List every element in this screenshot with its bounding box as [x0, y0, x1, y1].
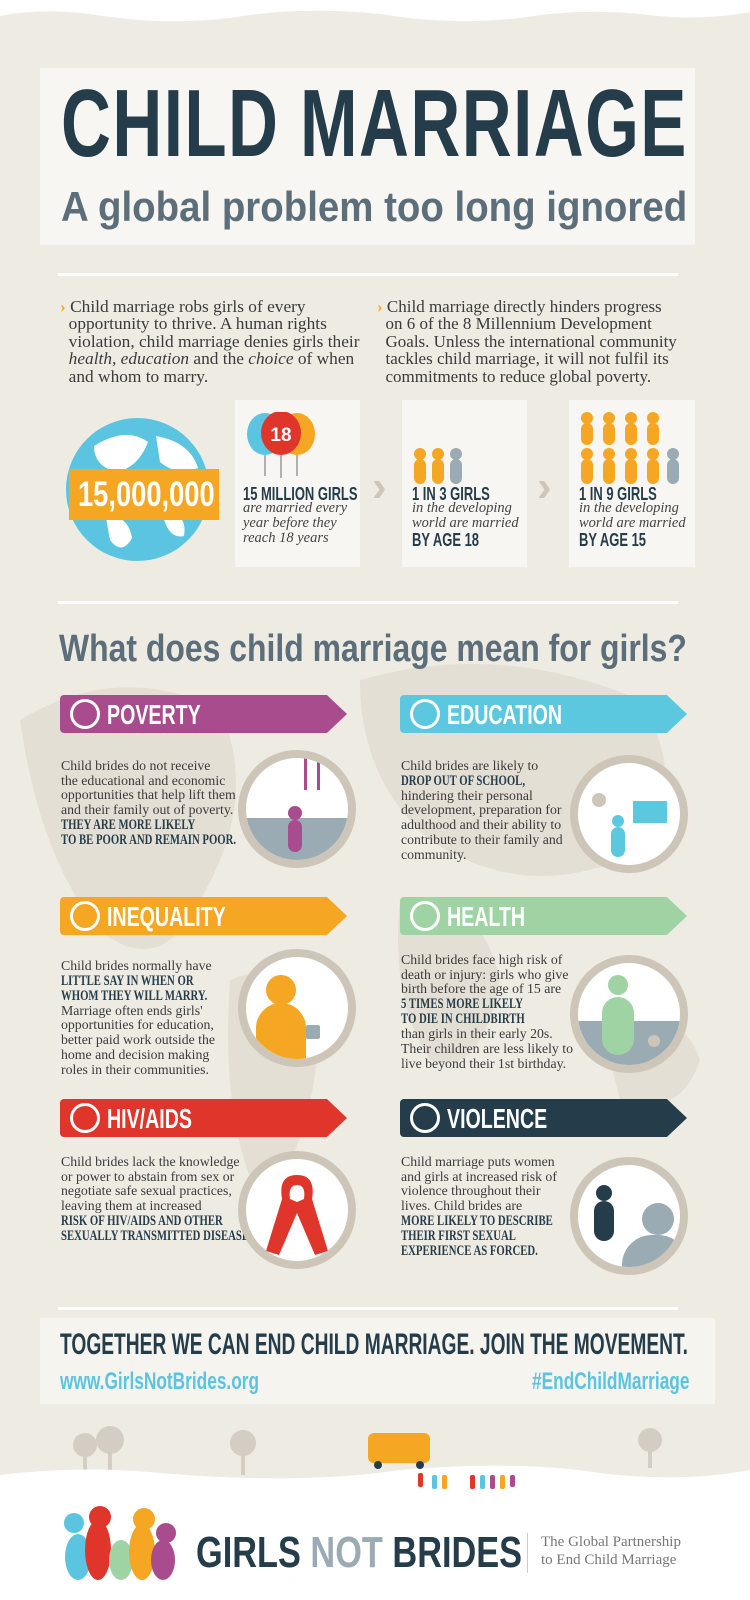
stat box: 15 million girls: reach 18 years [243, 530, 329, 546]
arrow: › [372, 462, 387, 511]
panel: inequality: Child brides normally have Marriage often ends girls' [61, 958, 212, 1018]
banner: education [400, 695, 687, 733]
panel: health [400, 897, 688, 1073]
panel: violence: violence throughout their [401, 1183, 540, 1198]
landscape with trees and bus [0, 1426, 750, 1600]
panel: inequality: WHOM THEY WILL MARRY. [61, 988, 207, 1004]
stat box: 1 in 3 [402, 400, 527, 567]
icon: balloons: 18 [270, 425, 292, 446]
stat box: 1 in 3: in the developing [412, 500, 512, 516]
panel: inequality: better paid work outside the [61, 1032, 215, 1047]
panel: violence: VIOLENCE [447, 1103, 547, 1134]
panel: health: death or injury: girls who give [401, 967, 568, 982]
link: hashtag: #EndChildMarriage [532, 1368, 689, 1395]
panel: health: birth before the age of 15 are than girls in their early 20s. [401, 981, 561, 1041]
stat box: 15 million girls: are married every [243, 500, 347, 516]
text: and their family out of poverty. [61, 802, 233, 817]
stat box: 1 in 9: 1 IN 9 GIRLS [579, 484, 657, 504]
panel: inequality: roles in their communities. [61, 1062, 209, 1077]
panel: health: Child brides face high risk of [401, 952, 562, 967]
globe with 15,000,000 banner [66, 418, 219, 561]
panel: inequality: opportunities for education, [61, 1017, 214, 1032]
panel: hiv/aids: leaving them at increased [61, 1198, 202, 1213]
panel: hiv/aids: Child brides lack the knowledge [61, 1154, 240, 1169]
subtitle: A global problem too long ignored [61, 183, 687, 230]
stat box: 1 in 9: world are married [579, 515, 686, 531]
icon circle: girl and man [570, 1157, 688, 1275]
intro text left: › Child marriage robs girls of every [60, 297, 306, 316]
intro text right [377, 297, 677, 386]
text [61, 758, 236, 848]
intro text right: commitments to reduce global poverty. [386, 367, 651, 386]
panel: inequality: home and decision making [61, 1047, 209, 1062]
panel: health: Their children are less likely to [401, 1041, 573, 1056]
banner: poverty [60, 695, 347, 733]
panel: violence [400, 1099, 688, 1275]
panel: health: HEALTH [447, 901, 525, 932]
panel: violence: lives. Child brides are [401, 1198, 522, 1213]
logo: girls not brides [64, 1506, 681, 1580]
icon circle: pregnant girl [570, 955, 688, 1073]
panel: education: contribute to their family and [401, 832, 563, 847]
panel: education: development, preparation for [401, 802, 562, 817]
intro text right: Goals. Unless the international community [386, 332, 677, 351]
link: website: www.GirlsNotBrides.org [60, 1368, 259, 1395]
stat box: 1 in 9: in the developing [579, 500, 679, 516]
panel: education: DROP OUT OF SCHOOL, [401, 773, 525, 789]
banner: education: EDUCATION [447, 699, 562, 730]
banner: poverty: POVERTY [107, 699, 201, 730]
intro text left [60, 297, 360, 386]
panel: education: Child brides are likely to hindering their personal [401, 758, 538, 803]
panel: education [400, 695, 688, 873]
globe with 15,000,000 banner: 15,000,000 [78, 475, 215, 514]
logo: girls not brides: to End Child Marriage [541, 1552, 676, 1568]
panel: inequality: LITTLE SAY IN WHEN OR [61, 973, 194, 989]
intro text left: violation, child marriage denies girls their [69, 332, 360, 351]
panel: hiv/aids: RISK OF HIV/AIDS AND OTHER [61, 1213, 223, 1229]
call to action box: TOGETHER WE CAN END CHILD MARRIAGE. JOIN THE MOVEMENT. [60, 1328, 688, 1361]
text: TO BE POOR AND REMAIN POOR. [61, 832, 236, 848]
stat box: 1 in 3: 1 IN 3 GIRLS [412, 484, 490, 504]
intro text left: and whom to marry. [69, 367, 208, 386]
icon circle: school [570, 755, 688, 873]
panel: health: live beyond their 1st birthday. [401, 1056, 566, 1071]
panel: education: adulthood and their ability to [401, 817, 561, 832]
icon: girls 1 in 3 [414, 448, 462, 484]
panel: inequality: INEQUALITY [107, 901, 226, 932]
intro text right: tackles child marriage, it will not fulfil its [386, 349, 669, 368]
top torn paper edge [0, 0, 750, 22]
stat box: 15 million girls: year before they [243, 515, 337, 531]
stat box: 15 million girls: 15 MILLION GIRLS [243, 484, 357, 504]
stat box: 1 in 3: BY AGE 18 [412, 530, 479, 550]
panel: education: community. [401, 847, 466, 862]
text: THEY ARE MORE LIKELY [61, 817, 195, 833]
intro text right: › Child marriage directly hinders progress [377, 297, 662, 316]
icon circle: bride with lock [238, 949, 356, 1067]
icon: girls 1 in 9 [581, 412, 679, 484]
panel: health: 5 TIMES MORE LIKELY [401, 996, 523, 1012]
panel: hiv/aids: or power to abstain from sex or [61, 1169, 234, 1184]
icon circle: red ribbon [238, 1151, 356, 1269]
title box [40, 68, 695, 245]
panel: violence: and girls at increased risk of [401, 1169, 557, 1184]
panel: hiv/aids: negotiate safe sexual practices, [61, 1183, 232, 1198]
panel: inequality [60, 897, 356, 1077]
panel: violence: Child marriage puts women [401, 1154, 555, 1169]
panel: violence: MORE LIKELY TO DESCRIBE [401, 1213, 553, 1229]
panel: health: TO DIE IN CHILDBIRTH [401, 1011, 525, 1027]
section heading: What does child marriage mean for girls? [59, 628, 687, 670]
icon circle: girl and ladder [238, 750, 356, 868]
panel: poverty [60, 695, 356, 868]
icon: balloons [247, 412, 315, 478]
panel: violence: EXPERIENCE AS FORCED. [401, 1243, 538, 1259]
intro text left: health, education and the choice of when [69, 349, 354, 368]
world map background [20, 664, 700, 1175]
intro text left: opportunity to thrive. A human rights [69, 314, 327, 333]
stat box: 1 in 9: BY AGE 15 [579, 530, 646, 550]
panel: hiv/aids: SEXUALLY TRANSMITTED DISEASES. [61, 1228, 258, 1244]
panel: hiv/aids [60, 1099, 356, 1269]
arrow: › [537, 462, 552, 511]
text: the educational and economic [61, 773, 225, 788]
stat box: 1 in 9 [569, 400, 695, 567]
logo: girls not brides: GIRLS NOT BRIDES [196, 1528, 522, 1577]
stat box: 1 in 3: world are married [412, 515, 519, 531]
logo: girls not brides: The Global Partnership [541, 1534, 681, 1550]
panel: hiv/aids: HIV/AIDS [107, 1103, 192, 1134]
text: opportunities that help lift them [61, 787, 236, 802]
call to action box [40, 1318, 715, 1404]
title: CHILD MARRIAGE [61, 70, 688, 177]
text: Child brides do not receive [61, 758, 210, 773]
stat box: 15 million girls [235, 400, 360, 567]
intro text right: on 6 of the 8 Millennium Development [386, 314, 652, 333]
panel: violence: THEIR FIRST SEXUAL [401, 1228, 516, 1244]
